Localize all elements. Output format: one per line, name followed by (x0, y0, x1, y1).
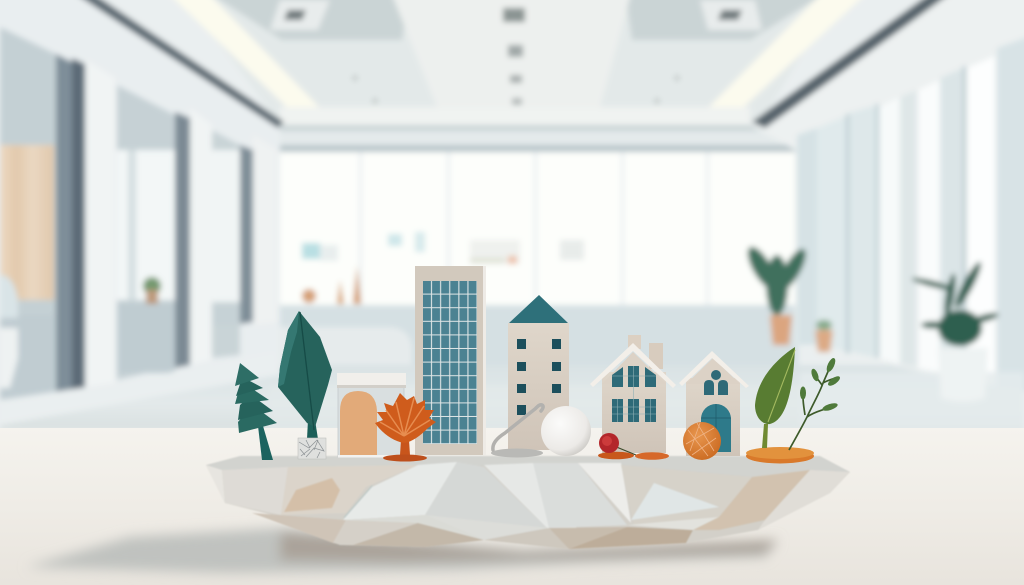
house with arched door (679, 351, 749, 456)
left wall with glass partitions (0, 0, 284, 425)
table surface (0, 428, 1024, 585)
icon: orange woven ball (683, 422, 721, 460)
icon: small pine tree (235, 363, 277, 460)
icon: grey hook on plate (491, 405, 543, 458)
right wall with tall windows (750, 0, 1024, 395)
tall building with window grid (415, 266, 486, 455)
icon: green leaf and sprig on orange disc (746, 347, 841, 464)
floor reflections (800, 372, 1024, 428)
faceted stone base (206, 456, 850, 549)
icon: red flower on orange discs (598, 433, 669, 460)
mid-rise building with teal roof (508, 295, 569, 450)
potted plants (742, 243, 999, 402)
icon: tall teal leaf with wire cube (278, 311, 332, 459)
icon: glass jar with orange sand (337, 373, 406, 458)
house with chimneys (590, 335, 676, 453)
shadow under stone (26, 528, 778, 573)
icon: orange fan tree (375, 393, 436, 462)
icon: white sphere (541, 406, 591, 456)
ceiling (165, 0, 870, 152)
floor (0, 365, 1024, 430)
back wall windows and counter (206, 152, 798, 391)
